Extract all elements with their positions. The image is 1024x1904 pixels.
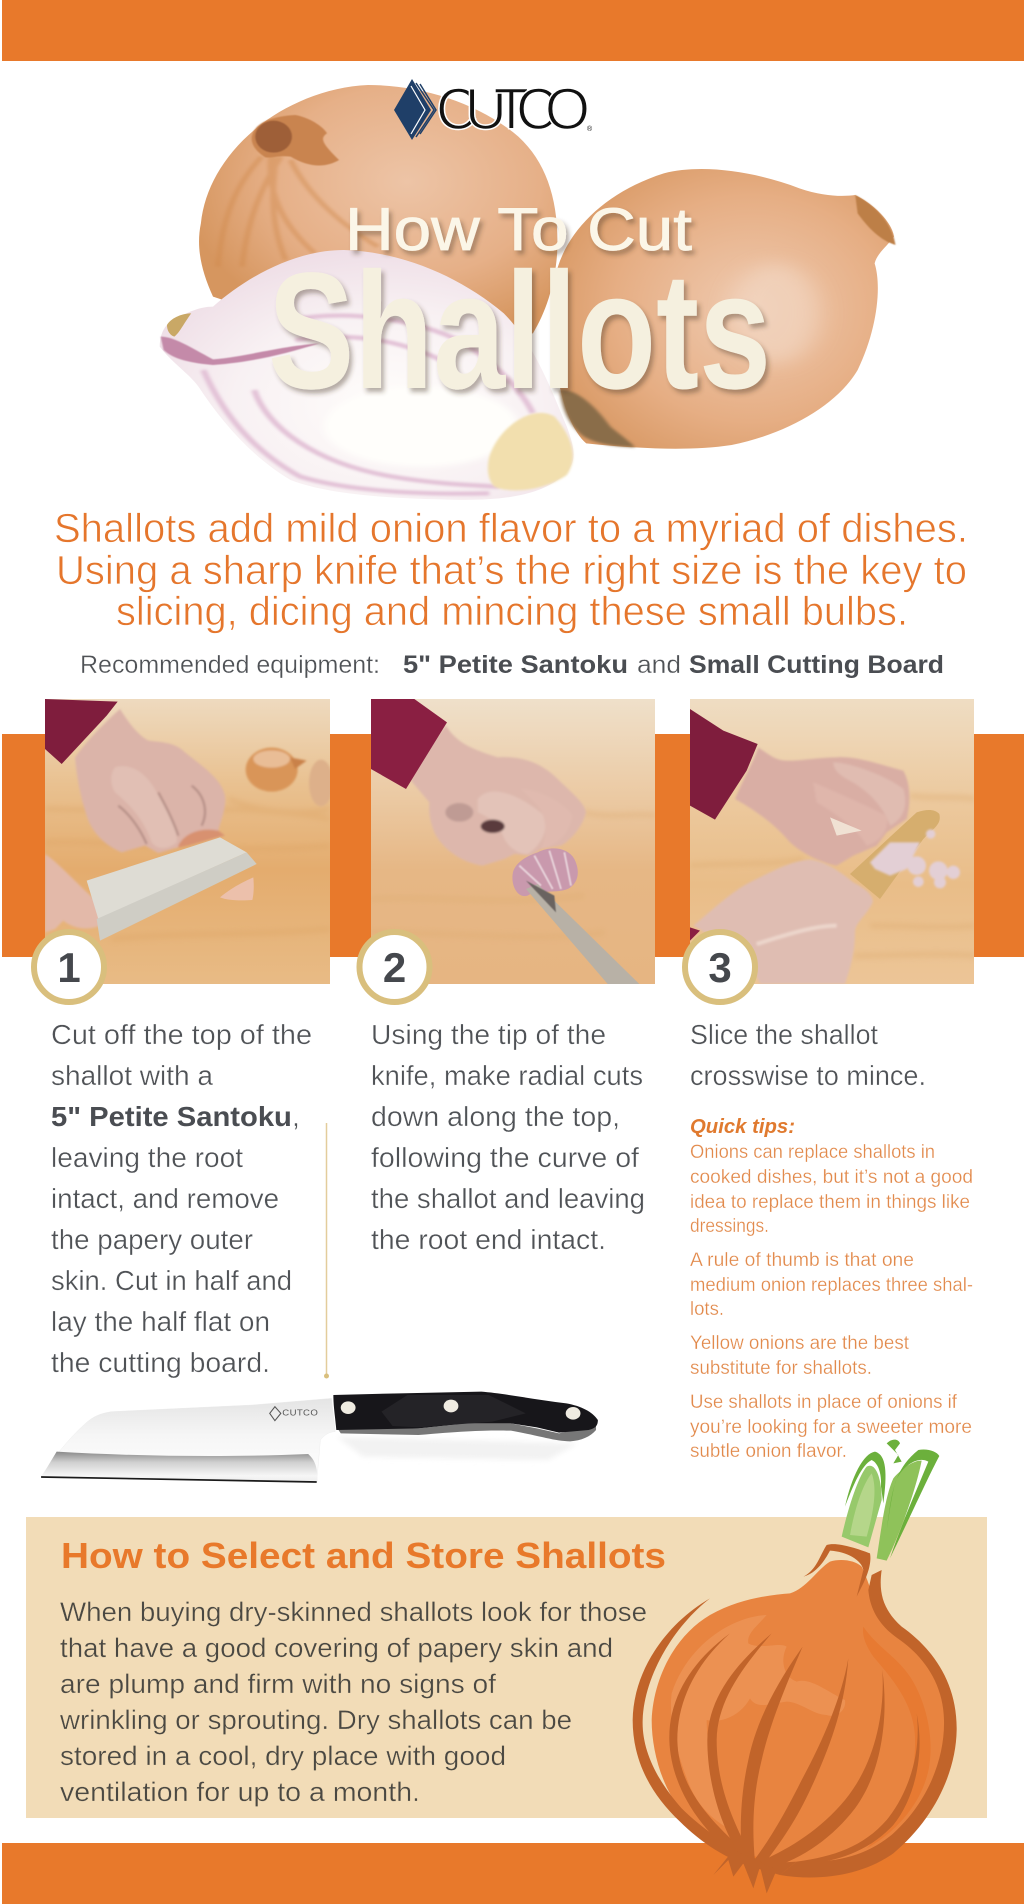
- handle rivets: [341, 1401, 356, 1414]
- right shallot tip: [855, 195, 895, 245]
- tip 1: Onions can replace shallots in: [690, 1142, 935, 1163]
- tip 2: A rule of thumb is that one: [690, 1250, 914, 1271]
- knife blade top: [87, 837, 247, 919]
- step 1 text: lay the half flat on: [51, 1306, 270, 1337]
- step 2 text: following the curve of: [371, 1142, 639, 1173]
- tip 4: you’re looking for a sweeter more: [690, 1417, 972, 1438]
- cut half left stem: [167, 313, 191, 337]
- handle grey bolster: [336, 1423, 596, 1441]
- onion leaves: [842, 1440, 939, 1561]
- knife: [850, 810, 940, 899]
- step badge 3: 3: [708, 944, 732, 991]
- panel: select and store: [26, 1517, 987, 1818]
- intro paragraph: Shallots add mild onion flavor to a myriad of dishes.: [54, 505, 968, 551]
- step 3 text: Slice the shallot: [690, 1019, 878, 1050]
- step 1 text: skin. Cut in half and: [51, 1265, 292, 1296]
- panel body text: When buying dry-skinned shallots look for those: [60, 1597, 647, 1627]
- onion right shade: [863, 1627, 931, 1848]
- wood grain: [587, 811, 654, 818]
- cutting hand: [693, 860, 873, 984]
- panel body text: wrinkling or sprouting. Dry shallots can be: [59, 1705, 572, 1735]
- onion roots: [713, 1850, 777, 1893]
- bottom orange bar: [2, 1843, 1024, 1904]
- cut half pink rings: [203, 316, 533, 494]
- panel body text: ventilation for up to a month.: [60, 1777, 420, 1807]
- step badge 2: [360, 932, 430, 1002]
- sleeve: [690, 709, 758, 820]
- onion left crescent: [633, 1598, 797, 1875]
- cut half white core: [324, 387, 518, 467]
- second shallot: [309, 760, 330, 806]
- step badge 1: 1: [57, 944, 81, 991]
- onion right outline: [780, 1570, 957, 1877]
- step 1 text: leaving the root: [51, 1142, 243, 1173]
- onion neck husk: [803, 1544, 870, 1597]
- hero photo: three shallots: [160, 85, 895, 500]
- cut half root tuft: [488, 413, 573, 490]
- blade logo: CUTCO: [282, 1408, 318, 1418]
- knife callout line: [324, 1123, 329, 1378]
- step 1 text: shallot with a: [51, 1060, 213, 1091]
- panel heading: How to Select and Store Shallots: [61, 1535, 666, 1576]
- right shallot highlight: [732, 263, 819, 363]
- recommended equipment line: 5" Petite Santoku: [403, 651, 628, 679]
- orange photo band: [2, 734, 1024, 957]
- handle facet: [381, 1395, 526, 1427]
- blade: [41, 1398, 335, 1482]
- cut half shallot: [160, 250, 574, 500]
- back shallot stem: [252, 115, 339, 165]
- step 1 text: intact, and remove: [51, 1183, 279, 1214]
- step 2 text: down along the top,: [371, 1101, 620, 1132]
- top orange bar: [2, 0, 1024, 61]
- tip 3: Yellow onions are the best: [690, 1333, 910, 1354]
- tip 2: [690, 1250, 973, 1320]
- blade logo: [270, 1407, 318, 1421]
- panel body text: are plump and firm with no signs of: [60, 1669, 497, 1699]
- cut half crease: [161, 337, 320, 365]
- holding hand: [735, 747, 909, 866]
- step 2 text: the shallot and leaving: [371, 1183, 645, 1214]
- onion skin in hand: [830, 817, 862, 836]
- title line: Shallots: Shallots: [268, 239, 771, 424]
- tip 2: medium onion replaces three shal-: [690, 1275, 973, 1296]
- step 3 text: crosswise to mince.: [690, 1060, 926, 1091]
- step 1 text: [51, 1019, 312, 1378]
- tip 1: cooked dishes, but it’s not a good: [690, 1167, 973, 1188]
- tip 1: dressings.: [690, 1216, 769, 1237]
- recommended equipment line: [80, 651, 944, 679]
- logo diamond: [394, 79, 436, 140]
- knife shadow: [337, 1437, 578, 1460]
- onion body: [652, 1560, 945, 1865]
- knife: [526, 884, 639, 984]
- step 2 text: [371, 1019, 645, 1255]
- scored shallot: [512, 848, 578, 896]
- tip 4: Use shallots in place of onions if: [690, 1392, 958, 1413]
- step 1 text: the cutting board.: [51, 1347, 270, 1378]
- sleeve: [371, 699, 447, 789]
- right shallot root: [560, 390, 635, 447]
- recommended equipment line: Recommended equipment:: [80, 651, 380, 679]
- quick tips heading: Quick tips:: [690, 1116, 795, 1138]
- blade edge: [41, 1477, 317, 1482]
- sleeve cuff: [690, 927, 700, 941]
- quick tips: [690, 1116, 973, 1462]
- step 2 text: the root end intact.: [371, 1224, 606, 1255]
- registered mark: ®: [587, 125, 593, 133]
- left hand on knife: [45, 854, 98, 933]
- step badge 3: [685, 932, 755, 1002]
- tip 1: [690, 1142, 973, 1237]
- panel body text: that have a good covering of papery skin and: [60, 1633, 613, 1663]
- panel background: [26, 1517, 987, 1818]
- step 1 text: the papery outer: [51, 1224, 253, 1255]
- hand: [411, 726, 586, 866]
- right shallot: [555, 169, 894, 449]
- recommended equipment line: Small Cutting Board: [689, 651, 944, 679]
- tip 4: subtle onion flavor.: [690, 1441, 847, 1462]
- step 2 text: Using the tip of the: [371, 1019, 606, 1050]
- panel body text: stored in a cool, dry place with good: [60, 1741, 506, 1771]
- tip 2: lots.: [690, 1299, 724, 1320]
- photo: step 2: [371, 699, 656, 984]
- blade bevel: [41, 1452, 317, 1482]
- recommended equipment line: and: [637, 651, 681, 679]
- step 1 text: Cut off the top of the: [51, 1019, 312, 1050]
- step 3 text: [690, 1019, 926, 1091]
- diced shallot: [870, 829, 960, 888]
- shallot on board: [246, 748, 307, 792]
- handle: [333, 1392, 598, 1433]
- step badge 1: [34, 932, 104, 1002]
- sleeve: [45, 699, 118, 764]
- tip 3: [690, 1333, 910, 1379]
- cut shallot top: [220, 877, 254, 900]
- logo wordmark: CUTCO: [436, 77, 590, 142]
- step 2 text: knife, make radial cuts: [371, 1060, 643, 1091]
- panel body text: [59, 1597, 647, 1807]
- title: [268, 196, 771, 424]
- intro paragraph: slicing, dicing and mincing these small bulbs.: [116, 588, 908, 634]
- photo: step 3: [690, 699, 975, 984]
- knife dark reflection: [526, 881, 556, 912]
- tip 1: idea to replace them in things like: [690, 1192, 970, 1213]
- back left shallot: [199, 85, 557, 340]
- back shallot streaks: [218, 153, 378, 267]
- knife blade bevel: [97, 852, 257, 941]
- logo: CUTCO: [394, 77, 593, 142]
- tip 4: [690, 1392, 972, 1462]
- step badge 2: 2: [383, 944, 406, 991]
- holding hand: [75, 709, 225, 853]
- icon: santoku knife: [41, 1392, 598, 1482]
- tip 3: substitute for shallots.: [690, 1358, 872, 1379]
- onion ribs: [669, 1633, 920, 1868]
- wood grain: [690, 796, 975, 956]
- step 1 text: 5" Petite Santoku ,: [51, 1101, 300, 1132]
- icon: onion illustration: [633, 1440, 957, 1893]
- wood grain: [50, 798, 326, 818]
- onion light patches: [671, 1615, 845, 1833]
- title line: How To Cut: How To Cut: [345, 196, 692, 263]
- intro paragraph: Using a sharp knife that’s the right size is the key to: [56, 547, 967, 593]
- photo: step 1: [45, 699, 333, 984]
- intro paragraph: [54, 505, 968, 634]
